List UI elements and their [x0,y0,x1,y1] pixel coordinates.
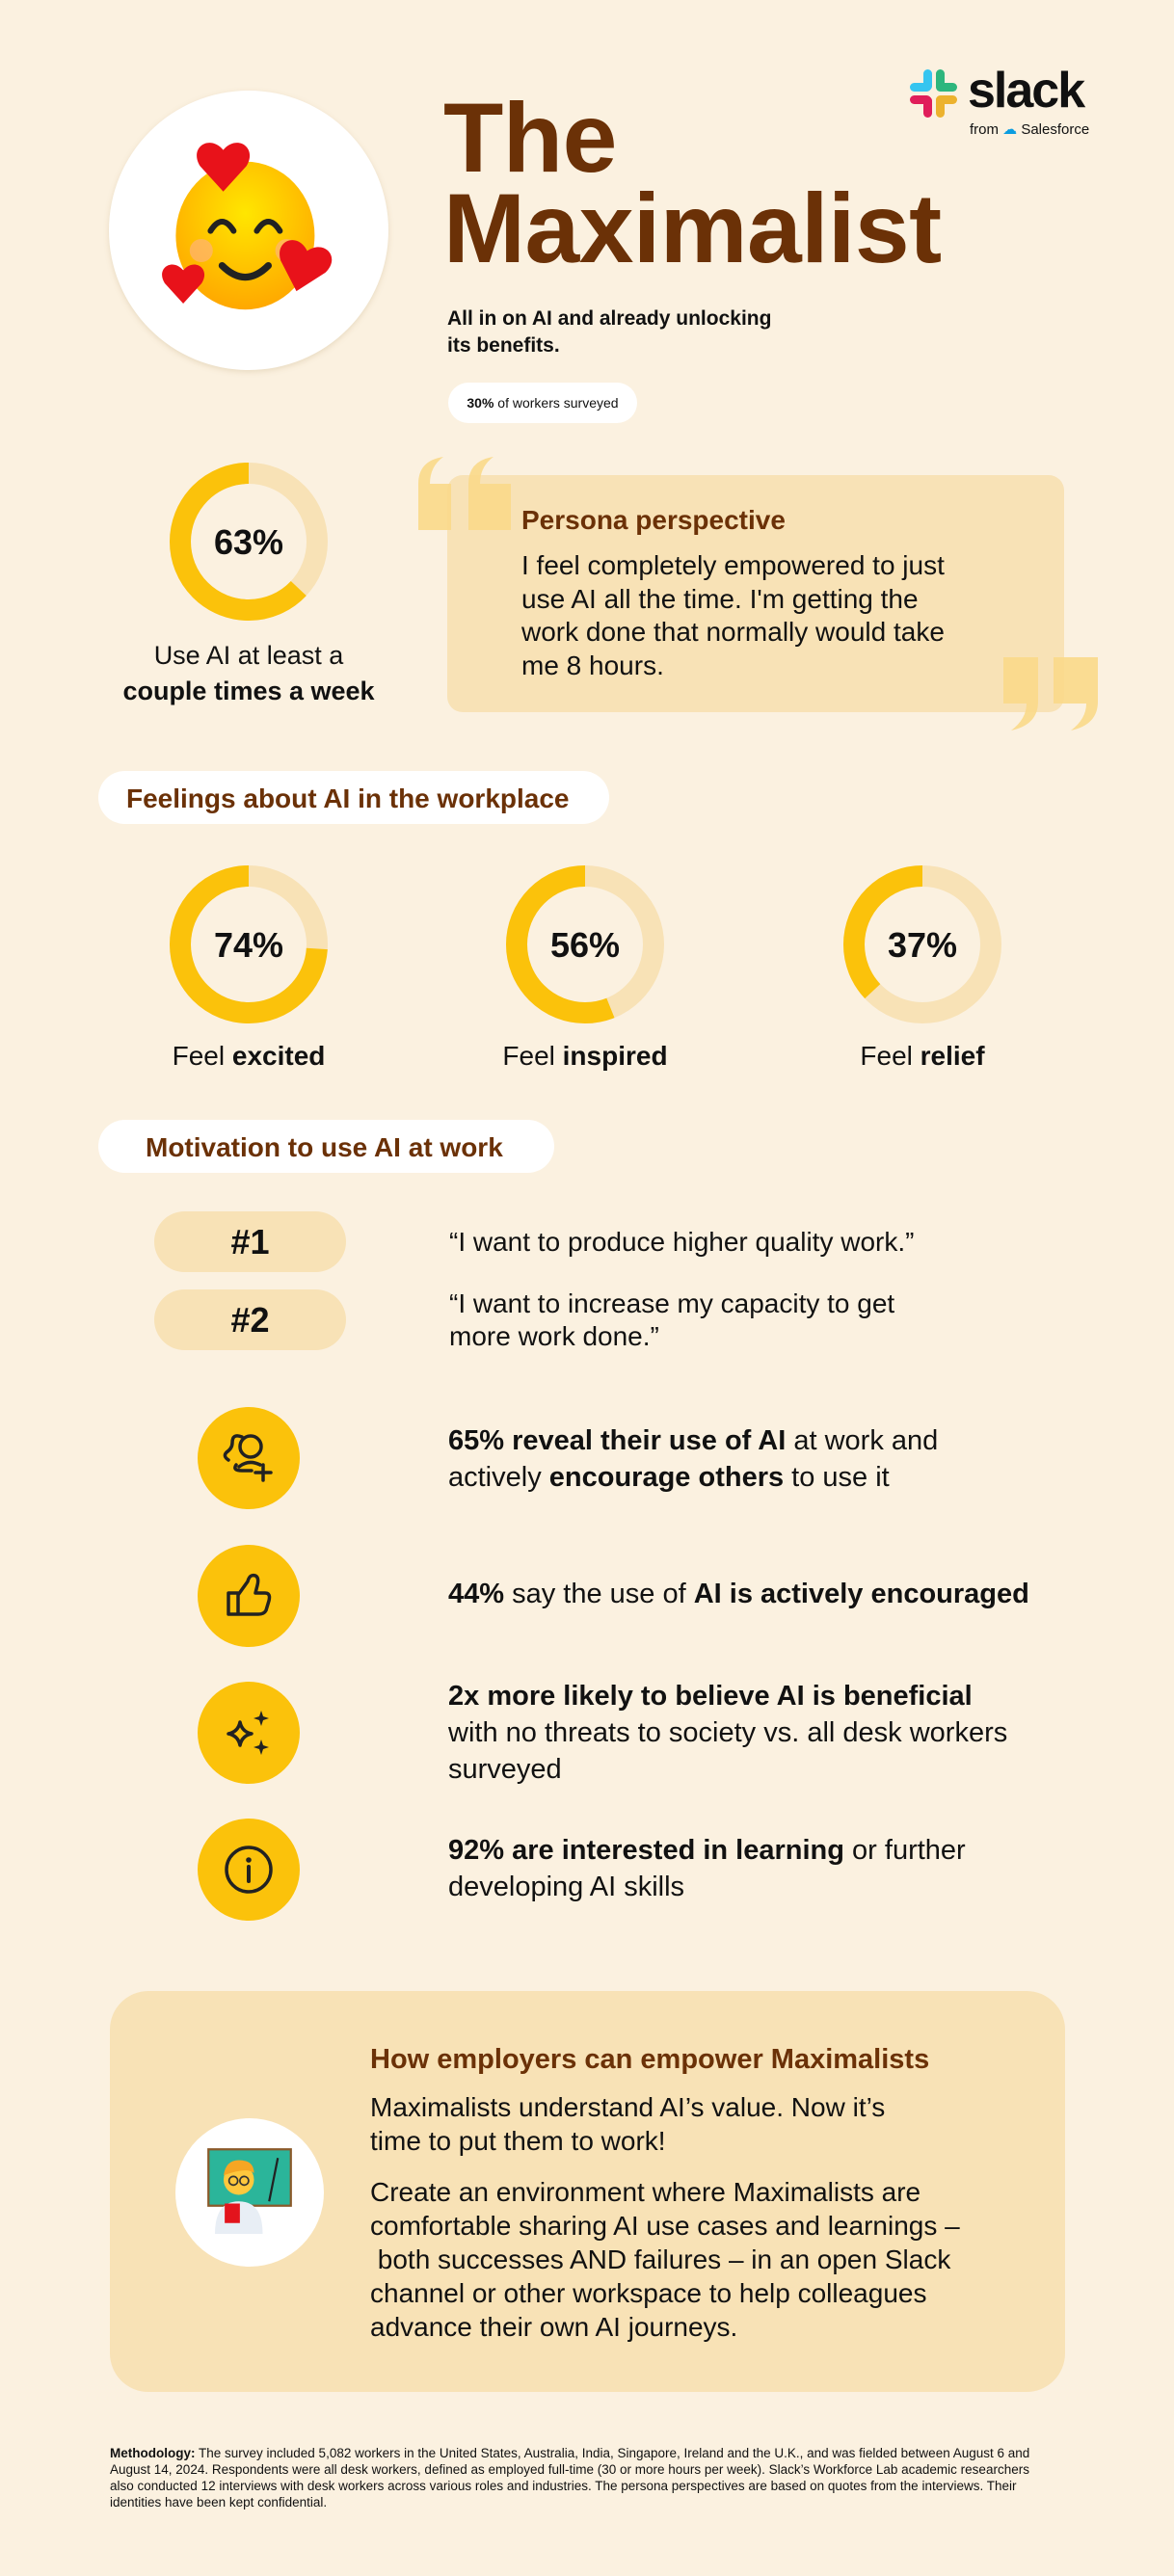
donut: 63%: 63% [214,522,283,562]
pill: 30% of workers surveyed [448,383,637,423]
icon: slack hash [910,69,957,118]
heading pill: motivation [98,1120,554,1173]
stat: 2x more likely: with no threats to society vs. all desk workers [448,1717,1007,1748]
icon: close quote [1003,657,1098,730]
donut: 56% inspired: 56% [550,925,620,965]
quote text: work done that normally would take [521,617,945,647]
donut: 37% relief [843,865,1001,1071]
quote box [447,475,1064,712]
donut: 74% excited [170,865,328,1071]
stat label: use AI: Use AI at least a [154,641,343,670]
body text 2: channel or other workspace to help colleagues [370,2278,926,2308]
stat: 92% learning: developing AI skills [448,1872,684,1902]
icon: info [198,1819,300,1921]
emoji circle [109,91,388,370]
rank #2: #2 [230,1300,270,1340]
stat: 44% encouraged [198,1545,1029,1647]
pill: 30% of workers surveyed: 30% of workers surveyed [467,395,619,411]
heading pill: feelings [98,771,609,824]
body text 2: comfortable sharing AI use cases and learnings – [370,2211,960,2241]
icon: smiling face with hearts [162,143,332,310]
subtitle [447,307,771,357]
stat: 2x more likely [198,1681,1007,1785]
panel: how employers can empower [110,1991,1065,2392]
methodology: Methodology: The survey included 5,082 workers in the United States, Australia, India, Singapore, Ireland and the U.K., and was fielded between August 6 and August 14, 2024. Respondents were all desk workers, defined as employed full-time (30 or more hours per week). Slack’s Workforce Lab academic researchers also conducted 12 interviews with desk workers across various roles and industries. The persona perspectives are based on quotes from the interviews. Their identities have been kept confidential. [110,2446,1029,2510]
stat: 65% encourage others [198,1407,938,1509]
stat: 2x more likely: 2x more likely to believe AI is beneficial [448,1681,973,1712]
heading pill: feelings: Feelings about AI in the workplace [126,783,569,813]
stat label: use AI [122,641,375,705]
quote text: me 8 hours. [521,650,664,680]
heading: Persona perspective [521,505,786,535]
stat label: use AI: couple times a week [122,677,375,705]
stat: 2x more likely: surveyed [448,1754,562,1785]
stat: 92% learning [198,1819,966,1921]
rank #2 [154,1288,894,1351]
donut: 63% [170,463,328,621]
subtitle: All in on AI and already unlocking [447,307,771,330]
quote text: I feel completely empowered to just [521,550,945,580]
rank #1 [154,1211,914,1272]
donut: 74% excited: 74% [214,925,283,965]
rank #1: “I want to produce higher quality work.” [449,1227,914,1257]
panel: persona perspective [418,457,1098,730]
icon: person add [198,1407,300,1509]
subtitle: its benefits. [447,334,560,357]
icon: thumbs up [198,1545,300,1647]
heading pill: motivation: Motivation to use AI at work [146,1132,503,1162]
rank #2: “I want to increase my capacity to get [449,1288,894,1318]
rank #2: more work done.” [449,1321,659,1351]
icon: teacher circle [175,2118,324,2267]
icon: open quote [418,457,511,530]
title: The [443,83,617,193]
stat: 65% encourage others: actively encourage others to use it [448,1462,890,1493]
rank #1: #1 [230,1222,270,1261]
quote text: use AI all the time. I'm getting the [521,584,919,613]
icon: sparkles [198,1682,300,1784]
body text 2: both successes AND failures – in an open Slack [378,2244,950,2274]
quote text [521,550,945,680]
body text 2: advance their own AI journeys. [370,2312,737,2342]
donut: 37% relief: Feel relief [860,1041,985,1071]
heading: How employers can empower Maximalists [370,2044,929,2075]
logo: slack from Salesforce: slack [968,63,1083,119]
logo: slack from Salesforce [910,63,1089,138]
donut: 56% inspired: Feel inspired [502,1041,668,1071]
body text 2 [370,2177,960,2342]
body text: time to put them to work! [370,2126,666,2156]
stat: 65% encourage others: 65% reveal their use of AI at work and [448,1425,938,1456]
body text [370,2092,885,2156]
body text 2: Create an environment where Maximalists are [370,2177,921,2207]
donut: 56% inspired [502,865,668,1071]
donut: 74% excited: Feel excited [173,1041,325,1071]
title: Maximalist [443,173,942,283]
donut: 37% relief: 37% [888,925,957,965]
body text: Maximalists understand AI’s value. Now it’s [370,2092,885,2122]
stat: 44% encouraged: 44% say the use of AI is actively encouraged [448,1579,1029,1609]
stat: 92% learning: 92% are interested in learning or further [448,1835,966,1866]
logo: slack from Salesforce: from ☁ Salesforce [970,121,1089,138]
title [443,83,942,283]
